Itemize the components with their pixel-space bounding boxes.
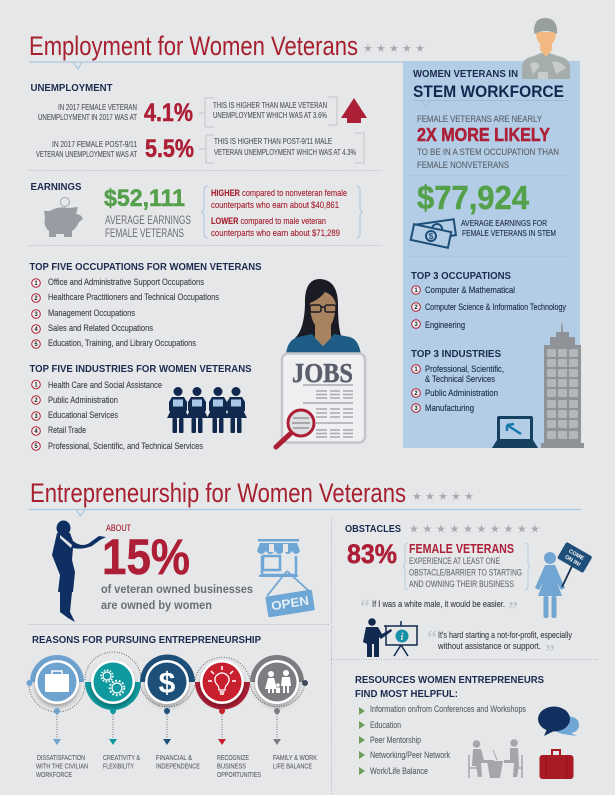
text: higher compared to nonveteran: [211, 188, 347, 211]
text: of veteran owned businesses: of veteran owned businesses: [101, 584, 253, 596]
icon: open storefront: OPEN: [270, 594, 310, 613]
text: 2x more likely: FEMALE VETERANS ARE NEARLY: [417, 114, 543, 125]
panel: STEM workforce content: [408, 69, 584, 448]
list: helpful resources: Education: [370, 720, 401, 731]
icon: dollar bills: [411, 219, 456, 248]
text: average earnings female veterans: AVERAGE EARNINGS: [105, 215, 191, 227]
list: top 3 industries: [411, 349, 504, 414]
icon: family: [265, 670, 291, 693]
callout: male veteran unemployment 3.6%: [199, 97, 337, 127]
brace: earnings comparison: [201, 186, 363, 238]
list: top five occupations: Healthcare Practitioners and Technical Occupations: [48, 292, 219, 303]
list: top five industries: Public Administration: [48, 395, 118, 406]
text: of veteran owned businesses: [101, 584, 253, 612]
stat: 5.5%: 5.5%: [145, 135, 194, 163]
callout: post-9/11 male unemployment 4.3%: [199, 133, 364, 163]
list: top five occupations: Education, Training, and Library Occupations: [48, 338, 196, 349]
quote: not-for-profit: ”: [545, 641, 555, 663]
text: 2x more likely: 2X MORE LIKELY: [417, 124, 551, 145]
icon: speech bubbles: [538, 706, 579, 736]
stars: entrepreneurship title: ★★★★★: [412, 490, 474, 503]
icon: light bulb: [208, 666, 236, 694]
list: top five industries: 3: [34, 414, 38, 420]
stars: employment title: ★★★★★: [363, 42, 425, 55]
reason: dissatisfaction: WORKFORCE: [36, 770, 72, 779]
icon: office building: [541, 323, 584, 448]
reason: recognize opportunities: OPPORTUNITIES: [217, 770, 261, 779]
reason: creativity: FLEXIBILITY: [103, 762, 134, 770]
text: average earnings in STEM: [461, 219, 556, 238]
text: of veteran owned businesses: are owned by women: [101, 600, 212, 612]
list: top 3 occupations: TOP 3 OCCUPATIONS: [411, 271, 511, 282]
icon: presenter with info board: [363, 618, 418, 657]
quote: white male: “: [360, 596, 370, 618]
stat: $52,111: $52,111: [104, 185, 185, 212]
title underline with pointer: [29, 510, 581, 516]
stat: 4.1%: 4.1%: [144, 99, 193, 127]
list: top five industries: [30, 364, 252, 452]
heading: resources: FIND MOST HELPFUL:: [355, 689, 458, 700]
text: 2017 female veteran unemployment: IN 2017 FEMALE VETERAN: [58, 103, 137, 112]
icon: dollar sign: $: [159, 667, 176, 700]
list: top five industries: 1: [34, 383, 38, 389]
heading: reasons: REASONS FOR PURSUING ENTREPRENEURSHIP: [32, 635, 261, 646]
list: top five industries: Retail Trade: [48, 425, 86, 436]
text: 2x more likely: [417, 114, 559, 171]
list: top five occupations: 5: [34, 342, 38, 348]
reason: financial: FINANCIAL &: [156, 753, 192, 762]
text: lower compared to male veteran: LOWER compared to male veteran: [211, 216, 326, 227]
icon: two people meeting at table: [469, 739, 522, 778]
heading: resources: RESOURCES WOMEN ENTREPRENEURS: [355, 675, 544, 686]
reason: dissatisfaction: DISSATISFACTION: [37, 753, 85, 762]
icon: woman with come on in sign: COME: [567, 549, 585, 562]
quote: white male: [360, 596, 518, 620]
list: top 3 occupations: 2: [414, 305, 418, 311]
text: about: ABOUT: [106, 523, 131, 534]
icon: presenter with info board: i: [401, 632, 404, 643]
heading: unemployment: UNEMPLOYMENT: [30, 83, 112, 94]
newspaper: [282, 354, 365, 442]
panel: 15% of businesses: [52, 520, 315, 622]
text: average earnings female veterans: FEMALE VETERANS: [105, 228, 184, 240]
icon: woman soldier: [522, 18, 570, 79]
list: top 3 industries: 3: [414, 406, 418, 412]
text: post-9/11 female veteran unemployment: VETERAN UNEMPLOYMENT WAS AT: [36, 150, 137, 159]
quote: white male: ”: [508, 598, 518, 620]
list: helpful resources: Peer Mentorship: [370, 735, 421, 746]
list: top five industries: 4: [34, 429, 38, 435]
icon: up arrow: [341, 98, 367, 123]
text: female veterans experience obstacles: FEMALE VETERANS: [409, 541, 514, 556]
text: higher compared to nonveteran: HIGHER compared to nonveteran female: [211, 188, 347, 199]
icon: briefcase: [45, 671, 69, 692]
text: average earnings in STEM: FEMALE VETERANS IN STEM: [462, 229, 556, 238]
panel: reasons for pursuing entrepreneurship: [26, 635, 317, 779]
icon: open storefront: [257, 539, 315, 618]
text: higher compared to nonveteran: counterparts who earn about $40,861: [211, 200, 339, 211]
list: top 3 industries: & Technical Services: [425, 374, 495, 385]
icon: woman with glasses reading JOBS newspaper: [276, 279, 365, 447]
list: top five industries: 5: [34, 444, 38, 450]
text: 2017 female veteran unemployment: UNEMPLOYMENT IN 2017 WAS AT: [38, 113, 137, 122]
reason: family and work: FAMILY & WORK: [273, 753, 317, 762]
list: top five occupations: Sales and Related Occupations: [48, 323, 153, 334]
text: post-9/11 female veteran unemployment: IN 2017 FEMALE POST-9/11: [52, 140, 137, 149]
heading: women veterans in STEM workforce: STEM WORKFORCE: [413, 82, 564, 101]
heading: top five industries: TOP FIVE INDUSTRIES FOR WOMEN VETERANS: [30, 364, 252, 375]
title: entrepreneurship: Entrepreneurship for Women Veterans: [30, 478, 406, 508]
list: top 3 industries: TOP 3 INDUSTRIES: [411, 349, 501, 360]
reason: recognize opportunities: [195, 657, 261, 779]
text: female veterans experience obstacles: [409, 541, 522, 589]
text: average earnings in STEM: AVERAGE EARNINGS FOR: [461, 219, 547, 228]
quote: not-for-profit: “: [427, 627, 437, 649]
text: 2x more likely: FEMALE NONVETERANS: [417, 160, 509, 171]
text: female veterans experience obstacles: EXPERIENCE AT LEAST ONE: [409, 556, 500, 566]
list: helpful resources: Information on/from Conferences and Workshops: [370, 704, 526, 715]
reason: financial: INDEPENDENCE: [156, 762, 200, 770]
text: 2017 female veteran unemployment: [38, 103, 137, 122]
list: top 3 occupations: Computer Science & Information Technology: [425, 302, 566, 313]
list: helpful resources: [359, 704, 526, 777]
stars: obstacles: ★★★★★★★★★★: [409, 522, 540, 536]
callout: post-9/11 male unemployment 4.3%: THIS IS HIGHER THAN POST-9/11 MALE: [214, 137, 332, 146]
icon: row of four women holding papers: [167, 387, 247, 433]
heading: JOBS: JOBS: [292, 358, 353, 388]
list: helpful resources: Networking/Peer Network: [370, 750, 450, 761]
heading: earnings: EARNINGS: [30, 182, 82, 193]
panel: resources: [355, 675, 579, 779]
panel: obstacles: [345, 522, 592, 663]
quote: not-for-profit: [427, 627, 572, 663]
heading: resources: [355, 675, 544, 700]
list: top five occupations: Office and Administrative Support Occupations: [48, 277, 204, 288]
brace: obstacles text: [403, 543, 530, 590]
text: average earnings female veterans: [105, 215, 191, 240]
text: lower compared to male veteran: [211, 216, 340, 239]
icon: dollar bills: $: [429, 232, 434, 241]
icon: red briefcase: [540, 750, 574, 779]
quote: not-for-profit: without assistance or support.: [437, 641, 541, 652]
callout: male veteran unemployment 3.6%: THIS IS HIGHER THAN MALE VETERAN: [213, 101, 327, 110]
quote: white male: If I was a white male, it would be easier.: [372, 599, 505, 610]
list: top five occupations: 2: [34, 296, 38, 302]
list: top 3 industries: Manufacturing: [425, 403, 474, 414]
list: top 3 occupations: 3: [414, 322, 418, 328]
list: helpful resources: Work/Life Balance: [370, 766, 428, 777]
text: lower compared to male veteran: counterparts who earn about $71,289: [211, 228, 340, 239]
text: female veterans experience obstacles: OBSTACLE/BARRIER TO STARTING: [409, 568, 522, 578]
text: 2x more likely: TO BE IN A STEM OCCUPATION THAN: [417, 147, 559, 158]
list: top five occupations: 4: [34, 327, 38, 333]
list: top five occupations: 3: [34, 312, 38, 318]
heading: women veterans in STEM workforce: WOMEN VETERANS IN: [413, 69, 518, 80]
callout: male veteran unemployment 3.6%: UNEMPLOYMENT WHICH WAS AT 3.6%: [213, 111, 327, 120]
list: top five industries: Health Care and Social Assistance: [48, 380, 162, 391]
panel: STEM workforce background: [403, 61, 580, 448]
list: top 3 occupations: Computer & Mathematical: [425, 285, 515, 296]
icon: piggy bank: [44, 198, 83, 237]
quote: not-for-profit: It's hard starting a not-for-profit, especially: [438, 630, 572, 641]
reason: recognize opportunities: RECOGNIZE: [217, 753, 249, 762]
list: top five occupations: 1: [34, 281, 38, 287]
icon: magnifying glass: [276, 410, 314, 447]
heading: women veterans in STEM workforce: [413, 69, 564, 101]
heading: obstacles: OBSTACLES: [345, 524, 401, 535]
text: female veterans experience obstacles: AND OWNING THEIR BUSINESS: [409, 579, 514, 589]
panel: earnings: [30, 182, 363, 240]
reason: family and work: LIFE BALANCE: [273, 762, 312, 770]
list: top 3 occupations: 1: [414, 288, 418, 294]
list: top 3 occupations: [411, 271, 566, 331]
reason: dissatisfaction: WITH THE CIVILIAN: [36, 762, 88, 770]
title underline with pointer: [29, 62, 403, 69]
list: top five occupations: [30, 262, 262, 349]
list: top five industries: Professional, Scientific, and Technical Services: [48, 441, 203, 452]
list: top five industries: 2: [34, 398, 38, 404]
reason: creativity: CREATIVITY &: [103, 753, 140, 762]
callout: post-9/11 male unemployment 4.3%: VETERAN UNEMPLOYMENT WHICH WAS AT 4.3%: [214, 148, 356, 157]
list: top 3 occupations: Engineering: [425, 320, 465, 331]
icon: gears: [101, 670, 124, 695]
list: top five industries: Educational Services: [48, 410, 118, 421]
title: employment: Employment for Women Veterans: [29, 31, 358, 61]
reason: financial: [140, 654, 200, 770]
panel: unemployment: [30, 83, 367, 163]
text: post-9/11 female veteran unemployment: [36, 140, 137, 159]
icon: businesswoman silhouette: [52, 520, 106, 622]
icon: laptop: [492, 416, 538, 448]
list: top 3 industries: Professional, Scientific,: [425, 364, 504, 375]
list: top five occupations: Management Occupations: [48, 308, 135, 319]
stat: 15%: 15%: [102, 529, 190, 585]
icon: woman with come on in sign: [535, 542, 592, 618]
list: top 3 industries: 2: [414, 391, 418, 397]
reason: family and work: [250, 655, 317, 770]
heading: top five occupations: TOP FIVE OCCUPATIONS FOR WOMEN VETERANS: [30, 262, 262, 273]
reason: dissatisfaction: [26, 655, 88, 779]
list: top 3 industries: Public Administration: [425, 388, 498, 399]
reason: recognize opportunities: BUSINESS: [217, 762, 246, 770]
list: top 3 industries: 1: [414, 367, 418, 373]
icon: woman with come on in sign: ON IN!: [564, 554, 582, 568]
stat: 83%: 83%: [347, 539, 397, 569]
stat: $77,924: $77,924: [417, 179, 530, 216]
reason: creativity: [85, 652, 141, 770]
